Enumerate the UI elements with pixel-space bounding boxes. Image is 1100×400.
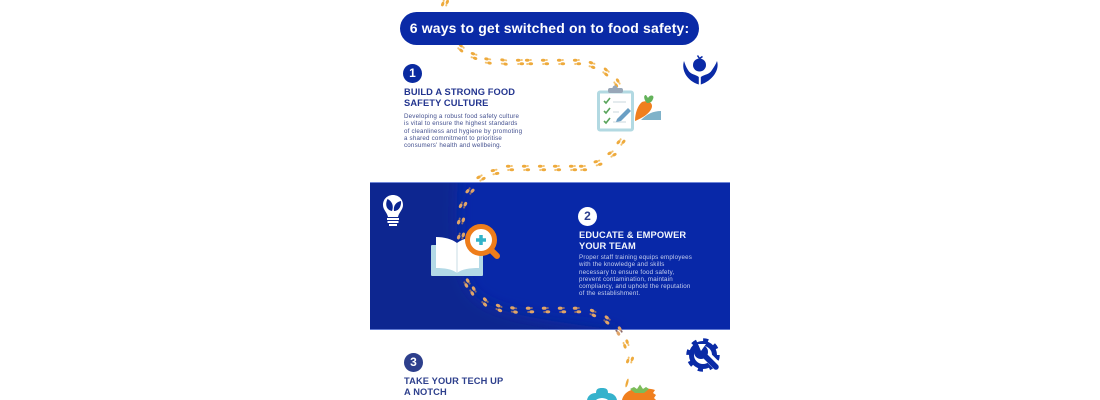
step 1 body text: Developing a robust food safety culture bbox=[404, 113, 519, 120]
icon: gear and tomato bbox=[587, 384, 656, 400]
icon: hands holding apple bbox=[683, 55, 718, 84]
step 3 heading: A NOTCH bbox=[404, 387, 447, 397]
title banner: 6 ways to get switched on to food safety: bbox=[410, 20, 689, 36]
step 2 heading bbox=[579, 230, 686, 251]
step 2 body text: Proper staff training equips employees bbox=[579, 254, 692, 261]
step 1 number bbox=[403, 64, 422, 83]
step 2 heading: YOUR TEAM bbox=[579, 241, 636, 251]
step 3 heading bbox=[404, 376, 503, 397]
step 2 body text: of the establishment. bbox=[579, 290, 640, 297]
icon: clipboard with carrot bbox=[597, 86, 661, 132]
step 1 body text: a shared commitment to prioritise bbox=[404, 135, 502, 142]
step 2 body text: prevent contamination, maintain bbox=[579, 276, 673, 283]
step 2 body text bbox=[579, 254, 692, 297]
step 2 heading: EDUCATE & EMPOWER bbox=[579, 230, 686, 240]
step 3 heading: TAKE YOUR TECH UP bbox=[404, 376, 503, 386]
step 1 heading: SAFETY CULTURE bbox=[404, 98, 488, 108]
step 1 body text: consumers' health and wellbeing. bbox=[404, 142, 502, 149]
step 1 body text: of cleanliness and hygiene by promoting bbox=[404, 128, 522, 134]
step 2 body text: compliancy, and uphold the reputation bbox=[579, 283, 691, 290]
step 2 body text: necessary to ensure food safety, bbox=[579, 268, 674, 276]
icon: light bulb with leaves bbox=[383, 195, 403, 226]
step 1 heading: BUILD A STRONG FOOD bbox=[404, 87, 515, 97]
panel: step 2 background bbox=[370, 182, 730, 330]
title banner bbox=[400, 12, 699, 45]
icon: gear with wrench bbox=[686, 338, 720, 372]
step 1 heading bbox=[404, 87, 515, 108]
step 1 body text bbox=[404, 113, 522, 149]
step 2 body text: with the knowledge and skills bbox=[579, 261, 665, 268]
step 2 number bbox=[578, 207, 597, 226]
step 1 body text: is vital to ensure the highest standards bbox=[404, 120, 518, 127]
step 3 number bbox=[404, 353, 423, 372]
step 1 number: 1 bbox=[409, 66, 416, 80]
step 3 number: 3 bbox=[410, 355, 417, 369]
footprint trail bbox=[441, 0, 634, 388]
step 2 number: 2 bbox=[584, 209, 591, 223]
icon: open book with magnifier bbox=[431, 224, 500, 276]
